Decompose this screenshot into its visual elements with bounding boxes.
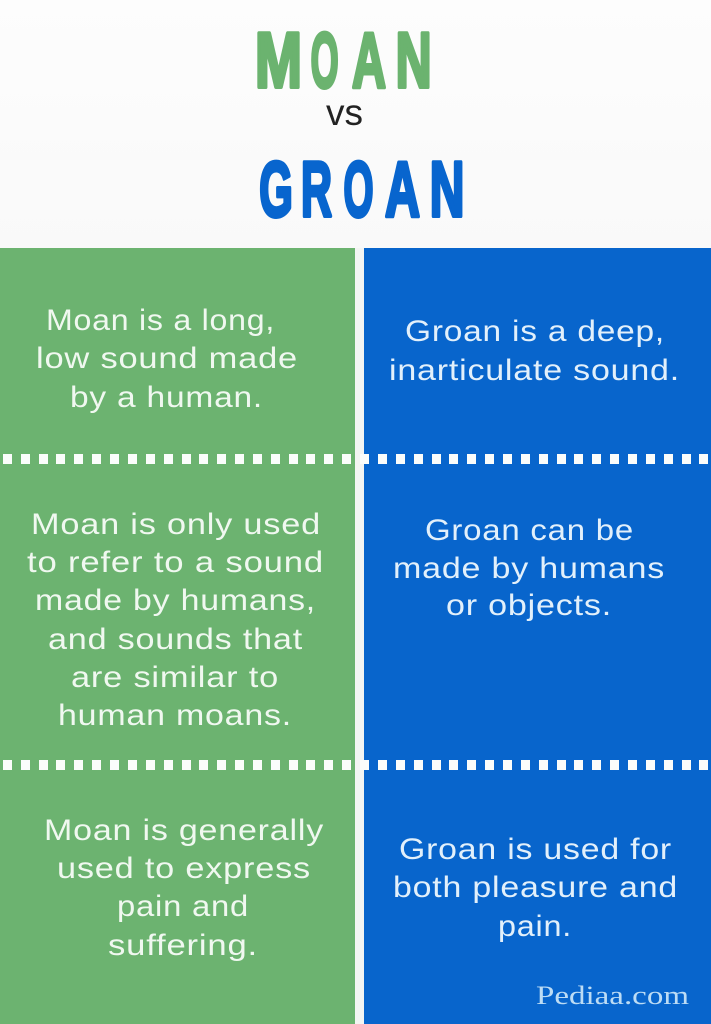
- text: moan row 2: are similar to: [71, 661, 279, 694]
- title: vs: vs: [326, 92, 363, 133]
- text: moan row 2: Moan is only used: [31, 508, 321, 541]
- title: MOAN: A: [352, 16, 386, 104]
- text: groan row 2: Groan can be: [425, 514, 634, 547]
- title: MOAN: N: [396, 16, 432, 104]
- text: moan row 2: to refer to a sound: [27, 546, 324, 579]
- title: GROAN: R: [301, 145, 332, 233]
- title: GROAN: A: [385, 145, 420, 233]
- title: GROAN: [259, 145, 464, 233]
- text: groan row 3: Groan is used for: [399, 833, 672, 866]
- text: moan row 2: made by humans,: [35, 584, 316, 617]
- text: groan row 2: made by humans: [393, 552, 665, 585]
- text: moan row 3: [44, 814, 324, 962]
- text: moan row 2: [27, 508, 324, 732]
- title: GROAN: N: [430, 145, 464, 233]
- panel: groan column: [364, 248, 711, 1024]
- text: moan row 3: Moan is generally: [44, 814, 324, 847]
- text: moan row 2: human moans.: [58, 699, 292, 732]
- title: MOAN: O: [311, 16, 339, 104]
- logo: Pediaa.com: Pediaa.com: [536, 981, 689, 1010]
- text: groan row 3: pain.: [498, 910, 572, 943]
- title: GROAN: G: [259, 145, 293, 233]
- text: groan row 1: inarticulate sound.: [389, 354, 680, 387]
- text: moan row 1: low sound made: [36, 342, 298, 375]
- text: moan row 1: [36, 304, 298, 414]
- text: moan row 2: and sounds that: [48, 623, 303, 656]
- text: moan row 3: used to express: [57, 852, 311, 885]
- divider: dotted row 2: [3, 760, 708, 770]
- title: GROAN: O: [344, 145, 374, 233]
- title: MOAN: [255, 16, 432, 104]
- text: groan row 1: [389, 315, 680, 387]
- text: groan row 3: [393, 833, 678, 943]
- text: groan row 2: [393, 514, 665, 622]
- text: moan row 1: by a human.: [70, 381, 263, 414]
- divider: dotted row 1: [3, 454, 708, 464]
- text: moan row 3: pain and: [117, 890, 249, 923]
- panel: moan column: [0, 248, 355, 1024]
- text: groan row 1: Groan is a deep,: [405, 315, 665, 348]
- title: MOAN: M: [255, 16, 302, 104]
- text: moan row 1: Moan is a long,: [46, 304, 275, 337]
- text: moan row 3: suffering.: [108, 929, 258, 962]
- text: groan row 3: both pleasure and: [393, 871, 678, 904]
- text: groan row 2: or objects.: [446, 589, 612, 622]
